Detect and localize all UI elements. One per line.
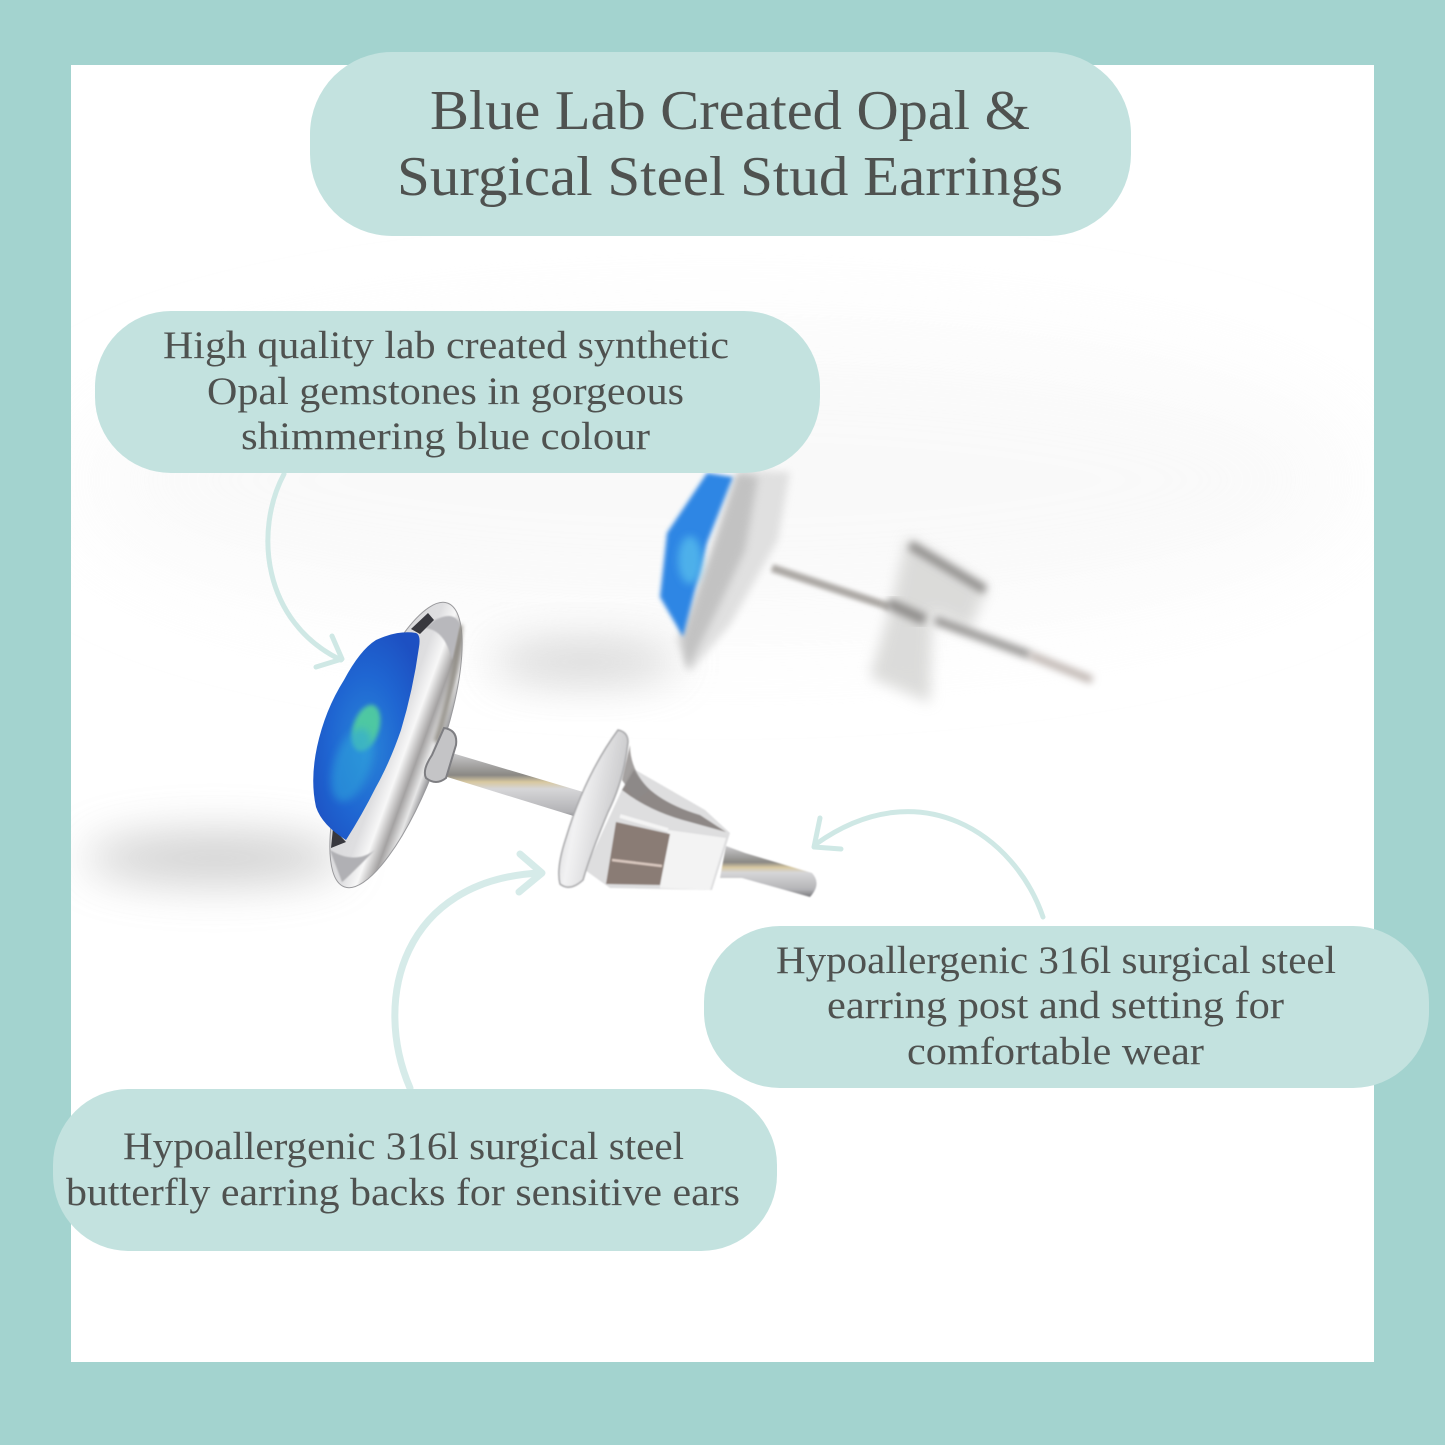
arrow: to opal gemstone	[268, 474, 342, 667]
title pill	[310, 52, 1131, 236]
title: Blue Lab Created Opal &	[430, 80, 1030, 142]
callout: opal gemstones: shimmering blue colour	[241, 415, 650, 458]
callout: earring post and setting: comfortable wear	[907, 1030, 1204, 1073]
arrow: to earring post	[814, 812, 1043, 917]
callout: opal gemstones	[95, 311, 820, 473]
front earring post	[447, 754, 582, 816]
callout: earring post and setting: Hypoallergenic 316l surgical steel	[776, 939, 1336, 982]
front opal gemstone	[313, 632, 420, 840]
front earring butterfly back	[559, 730, 817, 897]
post collar	[425, 728, 456, 782]
arrow: to butterfly back	[395, 854, 542, 1088]
callout: earring post and setting	[704, 926, 1429, 1088]
callout: butterfly backs: Hypoallergenic 316l surgical steel	[123, 1125, 684, 1168]
title: Surgical Steel Stud Earrings	[397, 146, 1063, 208]
callout: opal gemstones: High quality lab created synthetic	[163, 324, 729, 367]
bezel inner shadows	[331, 613, 434, 848]
callout: butterfly backs: butterfly earring backs for sensitive ears	[66, 1171, 740, 1214]
callout: opal gemstones: Opal gemstones in gorgeous	[207, 370, 684, 413]
bezel reflections	[436, 625, 460, 742]
faint background tone	[80, 330, 1360, 630]
blurred rear earring	[660, 470, 1092, 703]
front earring bezel	[329, 602, 463, 888]
shadow: back earring	[490, 642, 680, 682]
shadow: front earring	[85, 832, 345, 884]
callout: earring post and setting: earring post and setting for	[827, 984, 1284, 1027]
callout: butterfly backs	[53, 1089, 777, 1251]
